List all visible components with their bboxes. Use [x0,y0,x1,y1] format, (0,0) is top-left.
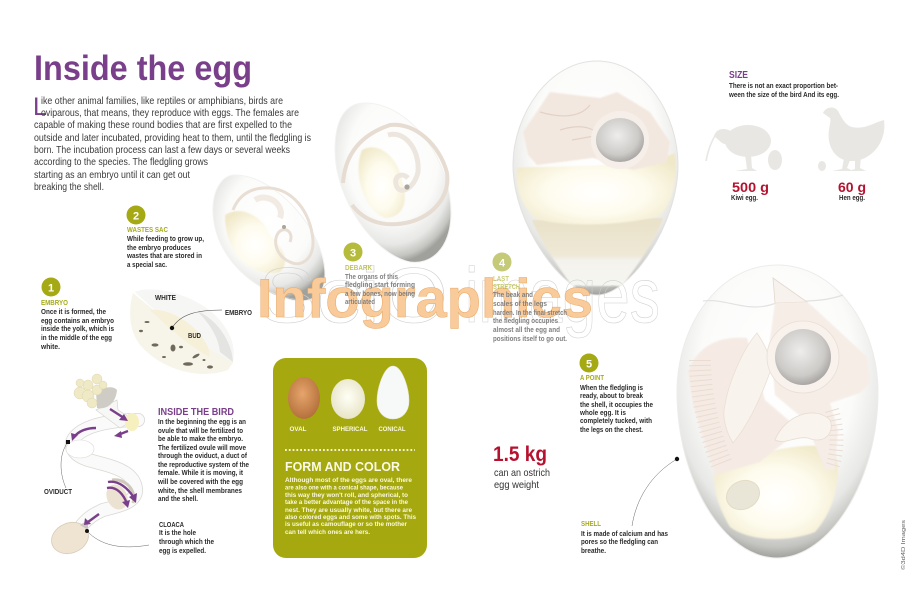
cloaca text: It is the hole [159,528,196,537]
size section: Hen egg. [839,193,865,202]
step 1: embryo: in the middle of the egg [41,333,112,342]
panel: form and color [273,358,427,558]
watermark [257,251,660,339]
intro text block: oviparous, that means, they reproduce with eggs. The females are [41,108,299,119]
step 1: embryo: Once it is formed, the [41,307,106,316]
illustration: egg stage 5 [677,265,878,558]
icon: spherical egg [331,379,365,419]
leader lines [61,442,68,488]
size section: 60 g [838,179,866,195]
step 5 text: completely tucked, with [580,416,652,425]
inside the bird text: white, the shell membranes [157,486,242,495]
step 5 text: the legs on the chest. [580,425,643,434]
inside the bird text: be able to make the embryo. [158,434,243,443]
intro text block: L [33,93,47,121]
step 5 text: the shell, it occupies the [580,400,653,409]
step 2: wastes sac: WASTES SAC [127,225,169,234]
panel: form and color: take a better advantage of the space in the [285,499,408,506]
illustration: egg stage 3 [335,103,451,262]
step 4 text (faded): LAST [493,274,509,283]
illustration: cut egg with embryo: WHITE [155,293,176,302]
embryo leader [172,310,222,328]
illustration: cut egg with embryo: EMBRYO [225,308,252,317]
panel: form and color: are also one with a conical shape, because [285,484,403,492]
step 4 text (faded): STRETCH [493,282,520,291]
panel: form and color: FORM AND COLOR [285,460,400,474]
step 1: embryo: white. [40,342,60,351]
step 3 text (faded): a few bones, now being [345,289,415,298]
step 3 text (faded) [344,242,415,306]
panel: form and color: can tell which ones are hers. [285,529,370,536]
intro text block: starting as an embryo until it can get out [34,170,190,181]
size section: 500 g [732,179,769,195]
inside the bird text: female. While it is moving, it [158,468,243,477]
step 4 text (faded): the fledgling occupies [493,316,558,325]
step 5 text: ready, about to break [580,391,644,400]
watermark: Infographics [257,267,593,329]
illustration: egg stage 2 [213,175,325,301]
step 3 text (faded): The organs of this [345,272,398,281]
step 4 text (faded): scales of the legs [493,299,547,308]
ostrich egg weight callout: 1.5 kg [493,443,547,466]
inside the bird text: the reproductive system of the [158,460,249,469]
badge 4: 4 [499,258,506,270]
illustration: cut egg with embryo [130,289,252,374]
inside the bird text [157,406,249,503]
step 3 text (faded): fledgling start forming [345,280,415,289]
illustration: egg stage 4 [513,61,678,295]
step 2: wastes sac: the embryo produces [127,243,191,252]
panel: form and color: is useful as camouflage or so the mother [285,521,407,528]
step 3 text (faded): DEBARK [345,263,373,272]
intro text block: ike other animal families, like reptiles or amphibians, birds are [41,96,283,107]
step 3 text (faded): articulated [345,297,375,306]
icon: hen silhouette with egg [818,107,884,171]
copyright credit: ©3d4D Images [900,520,907,570]
inside the bird text: INSIDE THE BIRD [158,406,234,418]
size section: There is not an exact proportion bet- [729,81,838,90]
step 5 text: A POINT [580,373,604,382]
badge 2: 2 [133,210,139,222]
ovary cluster [74,374,107,408]
panel: form and color: Although most of the eggs are oval, there [285,477,412,484]
icon: oval egg [288,377,320,419]
step 4 text (faded): harden. In the final stretch [493,308,567,317]
step 1: embryo: inside the yolk, which is [41,324,114,333]
panel: form and color: OVAL [290,426,306,433]
cloaca text: through which the [159,537,214,546]
cloaca text [159,520,214,555]
shell callout: breathe. [581,546,606,555]
step 5 text [579,354,653,434]
step 4 text (faded): The beak and [493,290,533,299]
watermark: SciO [258,251,448,339]
intro text block: breaking the shell. [34,182,104,193]
step 2: wastes sac: wastes that are stored in [126,251,202,260]
step 1: embryo [40,278,114,351]
ostrich egg weight callout: egg weight [494,479,539,491]
shell callout: It is made of calcium and has [581,529,668,538]
inside the bird text: will be covered with the egg [157,477,243,486]
step 2: wastes sac [126,206,204,269]
purple arrows [74,409,134,522]
panel: form and color: this way they won't roll, and spherical, to [285,492,408,499]
inside the bird text: ovule that will be fertilized to [158,426,243,435]
shell callout: pores so the fledgling can [581,537,658,546]
badge 5: 5 [586,358,592,370]
intro text block [33,93,311,193]
step 1: embryo: EMBRYO [41,298,68,307]
watermark: images [465,251,660,339]
intro text block: according to the species. The fledgling grows [34,157,208,168]
ostrich egg weight callout [493,443,550,491]
intro text block: capable of making these round bodies that are first expelled to the [34,120,292,131]
icon: kiwi silhouette with egg [706,125,782,171]
step 5 text: whole egg. It is [579,408,626,417]
badge 3: 3 [350,248,356,260]
ostrich egg weight callout: can an ostrich [494,467,550,479]
inside the bird text: and the shell. [158,494,198,503]
step 4 text (faded): positions itself to go out. [493,334,567,343]
step 1: embryo: egg contains an embryo [41,316,114,325]
size section: ween the size of the bird And its egg. [728,90,839,99]
step 4 text (faded): almost all the egg and [493,325,560,334]
badge 1: 1 [48,282,54,294]
illustration: oviduct diagram [44,374,149,559]
step 4 text (faded) [492,252,567,343]
size section [706,69,884,202]
step 2: wastes sac: a special sac. [127,260,167,269]
shell callout: SHELL [581,519,601,528]
cloaca text: egg is expelled. [159,546,206,555]
size section: Kiwi egg. [731,193,758,202]
step 2: wastes sac: While feeding to grow up, [127,234,204,243]
panel: form and color: CONICAL [378,426,406,433]
inside the bird text: In the beginning the egg is an [158,417,246,426]
illustration: cut egg with embryo: BUD [188,331,201,340]
panel: form and color: SPHERICAL [332,426,368,433]
intro text block: born. The incubation process can last a few days or several weeks [34,145,290,156]
panel: form and color: also colored eggs and some with spots. This [285,514,416,521]
cloaca text: CLOACA [159,520,185,529]
step 5 text: When the fledgling is [580,383,643,392]
size section: SIZE [729,69,748,81]
icon: conical egg [377,366,409,419]
panel: form and color: nest. They are usually white, but there are [285,507,412,514]
illustration: oviduct diagram: OVIDUCT [44,487,72,496]
inside the bird text: through the oviduct, a duct of [158,451,247,460]
inside the bird text: The fertilized ovule will move [158,443,246,452]
title: Inside the egg [34,49,252,88]
intro text block: outside and later incubated, providing heat to them, until the fledgling is [34,133,311,144]
shell callout [581,457,679,555]
